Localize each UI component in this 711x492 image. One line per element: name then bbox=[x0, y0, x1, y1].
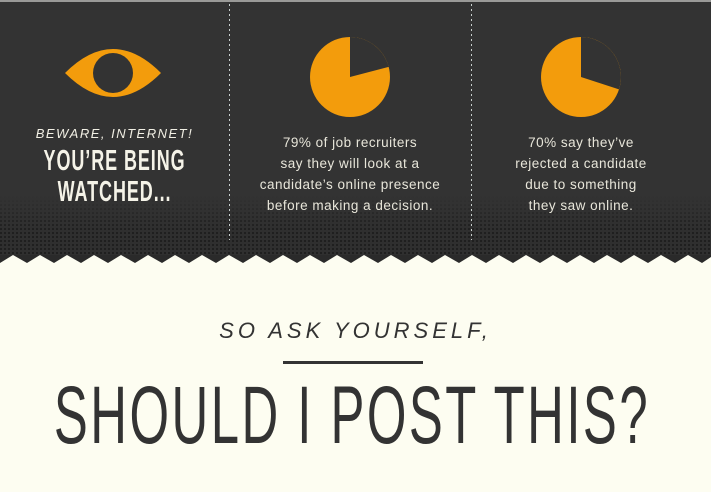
stat text: 70%: rejected a candidate bbox=[515, 156, 647, 171]
main heading: should i post this: SHOULD I POST THIS? bbox=[54, 370, 650, 461]
stat text: 79% bbox=[260, 135, 440, 213]
dark header panel bbox=[0, 0, 711, 263]
pie chart: 70% bbox=[541, 37, 621, 117]
icon: eye bbox=[65, 49, 161, 97]
divider line bbox=[283, 361, 423, 364]
heading: you're being watched: YOU’RE BEING bbox=[44, 145, 186, 177]
heading: you're being watched: WATCHED... bbox=[58, 176, 171, 208]
stat text: 79%: 79% of job recruiters bbox=[283, 135, 417, 150]
stat text: 70%: due to something bbox=[525, 177, 637, 192]
stat text: 70%: they saw online. bbox=[529, 198, 633, 213]
stat text: 79%: candidate’s online presence bbox=[260, 177, 440, 192]
stat text: 79%: say they will look at a bbox=[280, 156, 420, 171]
stat text: 70%: 70% say they’ve bbox=[528, 135, 634, 150]
pie chart: 79% bbox=[310, 37, 390, 117]
subheading: so ask yourself: SO ASK YOURSELF, bbox=[219, 318, 492, 343]
stat text: 70% bbox=[515, 135, 647, 213]
subheading: beware internet: BEWARE, INTERNET! bbox=[36, 126, 193, 141]
heading: you're being watched bbox=[44, 145, 186, 208]
stat text: 79%: before making a decision. bbox=[267, 198, 433, 213]
